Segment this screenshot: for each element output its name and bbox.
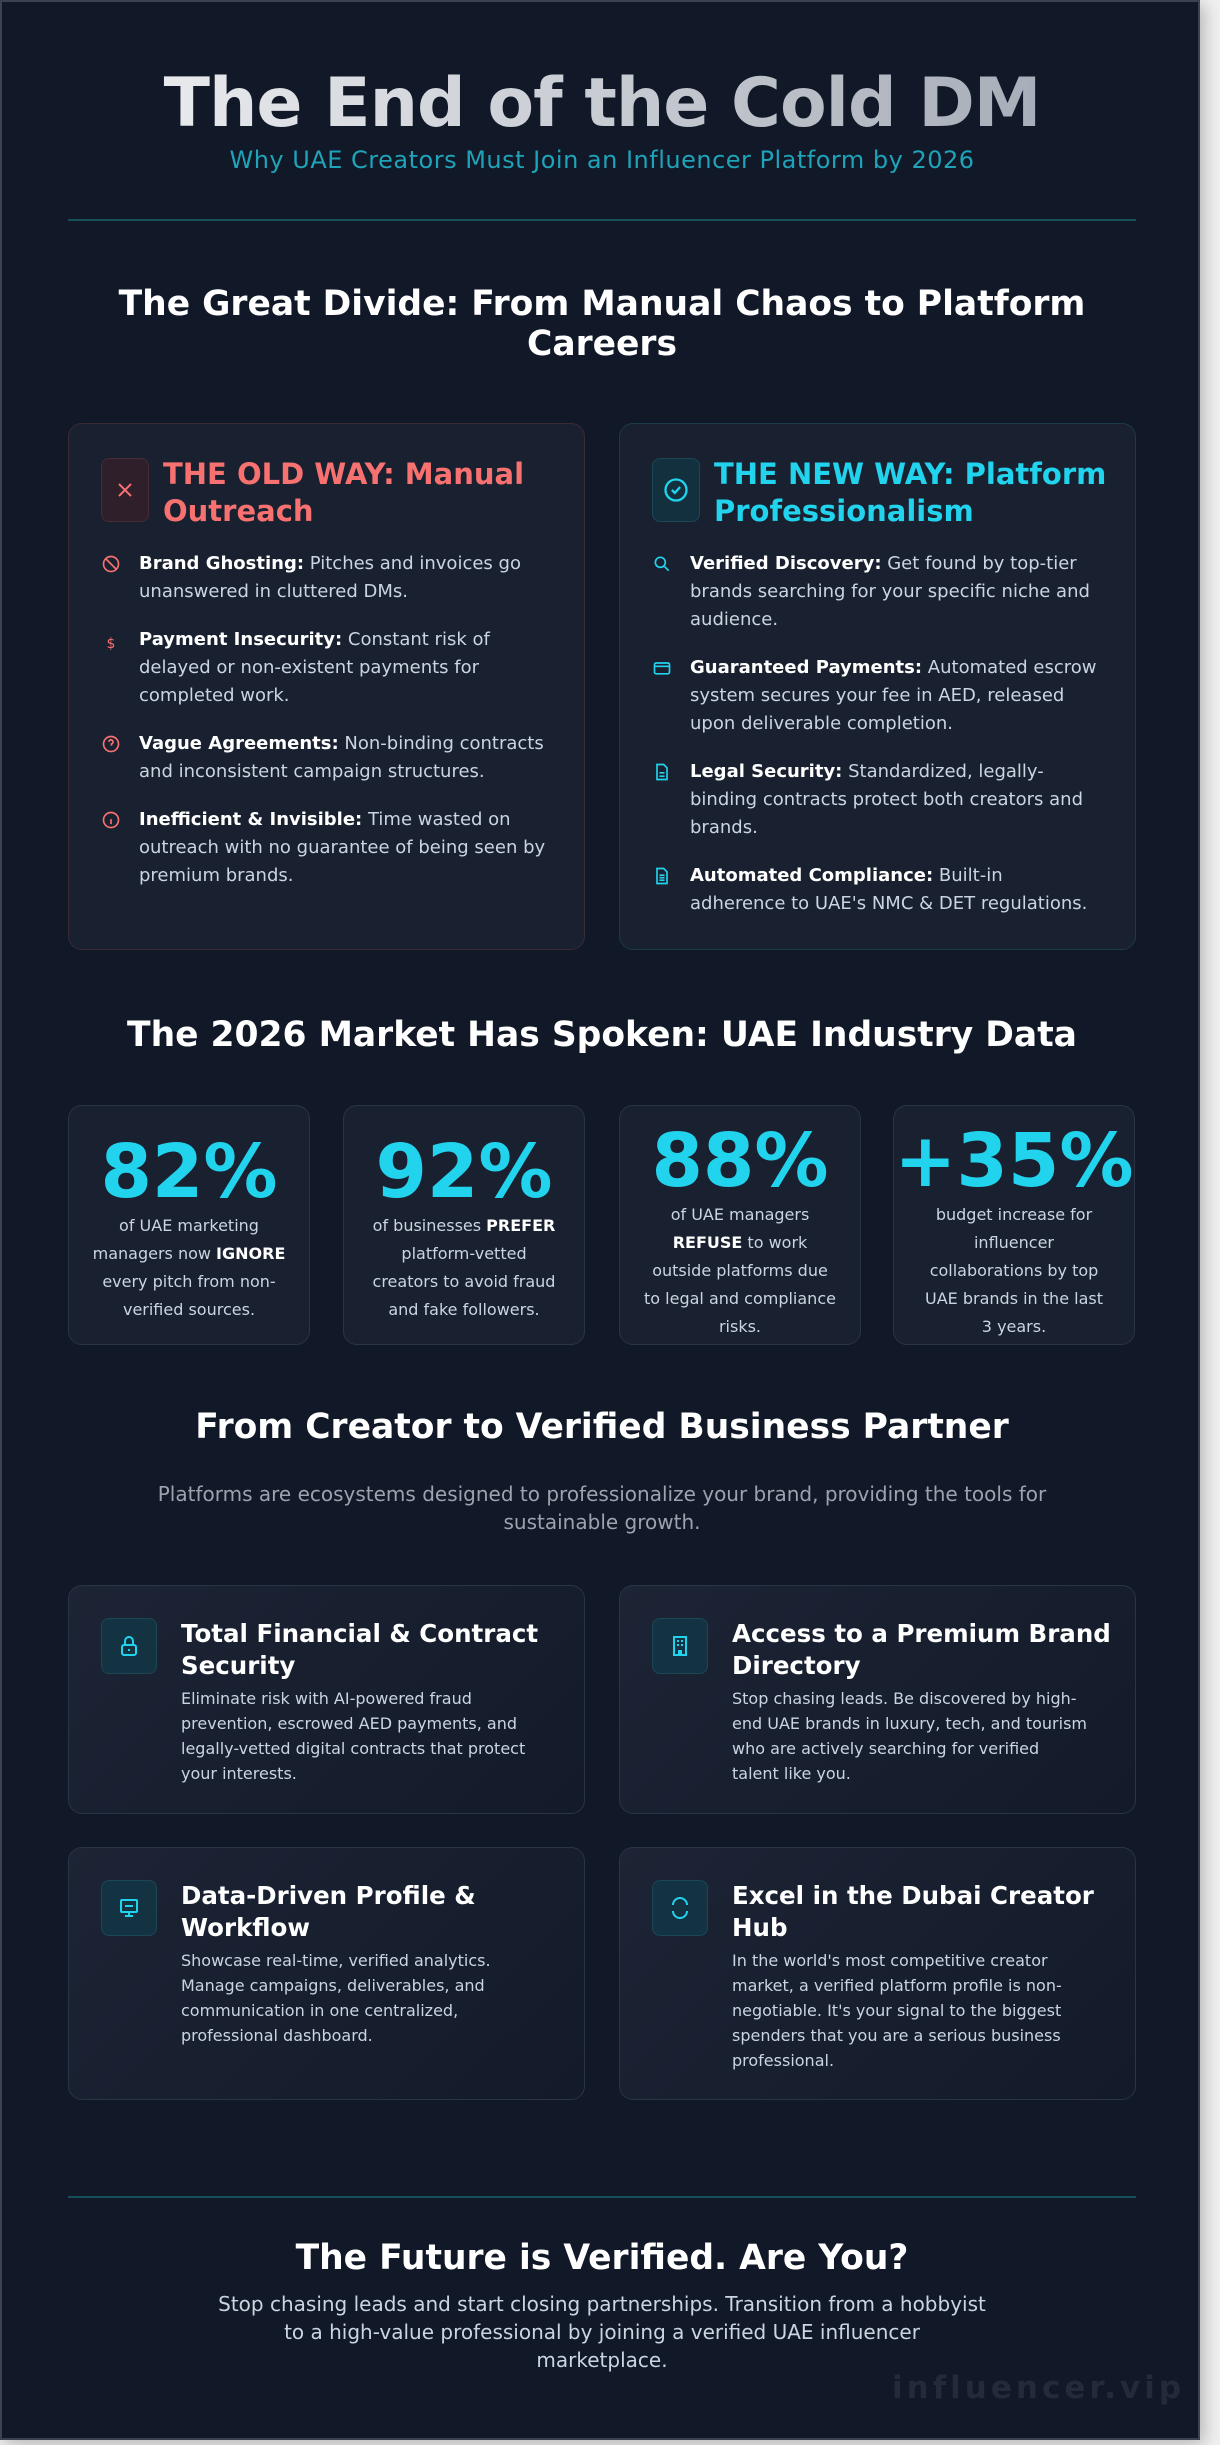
stat 35: +35%: [894, 1118, 1134, 1204]
heading: great divide: Careers: [527, 324, 677, 364]
closing text: [218, 2292, 986, 2372]
item: guaranteed payments: Guaranteed Payments: Automated escrow system secures your fee in AED, released upon deliverable completion.: [690, 657, 1097, 734]
stat 35: UAE brands in the last: [925, 1289, 1103, 1308]
heading: market data: The 2026 Market Has Spoken: UAE Industry Data: [127, 1015, 1077, 1055]
stat 82: every pitch from non-: [102, 1272, 276, 1291]
watermark: influencer.vip: [892, 2370, 1185, 2406]
stat 82: 82%: [100, 1129, 278, 1215]
title: The End of the Cold DM: [164, 64, 1040, 143]
feature: dubai hub: In the world's most competitive creator market, a verified platform profile is non-negotiable. It's your signal to the biggest spenders that you are a serious business professional.: [732, 1951, 1062, 2070]
closing text: Stop chasing leads and start closing partnerships. Transition from a hobbyist: [218, 2292, 986, 2316]
feature: data profile: Data-Driven Profile & Workflow: [181, 1881, 476, 1942]
new way heading: [652, 457, 1106, 528]
feature: data profile: Showcase real-time, verified analytics. Manage campaigns, deliverables, and communication in one centralized, professional dashboard.: [181, 1951, 491, 2045]
item: payment insecurity: Payment Insecurity: Constant risk of: [139, 629, 490, 650]
stat 82: [68, 1105, 310, 1345]
item: verified discovery: Verified Discovery: Get found by top-tier brands searching for your specific niche and audience.: [690, 553, 1090, 630]
intro text: [158, 1482, 1046, 1534]
panel: new way: [619, 423, 1136, 950]
feature: security: [68, 1585, 585, 1814]
item: vague agreements: Vague Agreements: Non-binding contracts and inconsistent campaign structures.: [139, 733, 544, 782]
feature: security: Eliminate risk with AI-powered fraud prevention, escrowed AED payments, and legally-vetted digital contracts that protect your interests.: [181, 1689, 525, 1783]
heading: great divide: The Great Divide: From Manual Chaos to Platform: [119, 284, 1085, 324]
heading: future verified: The Future is Verified. Are You?: [296, 2238, 908, 2278]
stat 35: 3 years.: [982, 1317, 1046, 1336]
new way heading: Professionalism: [714, 494, 974, 528]
stat 88: 88%: [651, 1118, 829, 1204]
old way heading: THE OLD WAY: Manual Outreach: [163, 457, 524, 528]
stat 88: REFUSE to work: [673, 1233, 807, 1252]
item: compliance: Automated Compliance: Built-in adherence to UAE's NMC & DET regulations.: [690, 865, 1087, 914]
stat 82: verified sources.: [123, 1300, 255, 1319]
feature: directory: [619, 1585, 1136, 1814]
item: payment insecurity: [107, 629, 490, 706]
feature: dubai hub: Excel in the Dubai Creator Hub: [732, 1881, 1094, 1942]
subtitle: Why UAE Creators Must Join an Influencer Platform by 2026: [229, 146, 975, 174]
feature: dubai hub: [619, 1847, 1136, 2100]
stat 35: collaborations by top: [930, 1261, 1098, 1280]
stat 88: outside platforms due: [652, 1261, 828, 1280]
stat 88: [619, 1105, 861, 1345]
closing text: marketplace.: [536, 2348, 668, 2372]
stat 92: [343, 1105, 585, 1345]
item: brand ghosting: Brand Ghosting: Pitches and invoices go unanswered in cluttered DMs.: [139, 553, 521, 602]
item: inefficient: Inefficient & Invisible: Time wasted on outreach with no guarantee of being seen by premium brands.: [139, 809, 545, 886]
panel: old way: [68, 423, 585, 950]
feature: directory: Directory: [732, 1651, 861, 1680]
feature: security: Total Financial & Contract Security: [181, 1619, 538, 1680]
stat 92: of businesses PREFER: [373, 1216, 555, 1235]
stat 35: budget increase for: [936, 1205, 1092, 1224]
stat 92: and fake followers.: [388, 1300, 540, 1319]
stat 82: of UAE marketing: [119, 1216, 259, 1235]
stat 35: influencer: [974, 1233, 1054, 1252]
icon: lock: [101, 1618, 157, 1674]
intro text: sustainable growth.: [504, 1510, 700, 1534]
closing text: to a high-value professional by joining a verified UAE influencer: [284, 2320, 920, 2344]
stat 92: platform-vetted: [401, 1244, 527, 1263]
stat 82: managers now IGNORE: [93, 1244, 285, 1263]
item: payment insecurity: delayed or non-existent payments for completed work.: [139, 657, 479, 706]
heading: great divide: [118, 284, 1085, 364]
feature: directory: Access to a Premium Brand: [732, 1619, 1111, 1648]
icon: sync: [652, 1880, 708, 1936]
feature: directory: Stop chasing leads. Be discovered by high-end UAE brands in luxury, tech, and tourism who are actively searching for verified talent like you.: [732, 1689, 1087, 1783]
heading: creator to partner: From Creator to Verified Business Partner: [195, 1407, 1009, 1447]
intro text: Platforms are ecosystems designed to professionalize your brand, providing the tools for: [158, 1482, 1046, 1506]
stat 35: [893, 1105, 1135, 1345]
icon: building: [652, 1618, 708, 1674]
stat 88: risks.: [719, 1317, 761, 1336]
icon: monitor: [101, 1880, 157, 1936]
stat 88: to legal and compliance: [644, 1289, 836, 1308]
stat 92: creators to avoid fraud: [373, 1272, 555, 1291]
feature: data profile: [68, 1847, 585, 2100]
stat 92: 92%: [375, 1129, 553, 1215]
new way heading: THE NEW WAY: Platform: [714, 457, 1106, 491]
title: [2, 56, 1202, 152]
item: payment insecurity: $: [107, 636, 115, 652]
item: legal security: Legal Security: Standardized, legally-binding contracts protect both creators and brands.: [690, 761, 1083, 838]
stat 88: of UAE managers: [671, 1205, 809, 1224]
